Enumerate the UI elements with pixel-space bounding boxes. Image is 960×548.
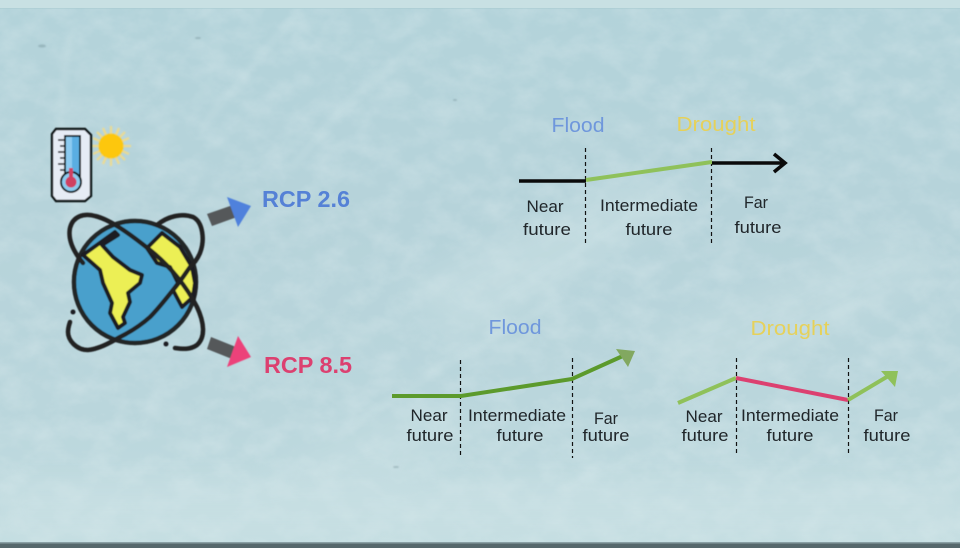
labels: timeline periods: Far: [874, 407, 898, 425]
labels: timeline periods: future: [734, 219, 782, 237]
line: rising flood trend: [392, 355, 625, 396]
labels: timeline periods: future: [496, 427, 544, 445]
labels: timeline periods: future: [864, 427, 910, 445]
line: intermediate future falling pink: [736, 378, 848, 400]
heading: Drought: Drought: [750, 318, 830, 340]
labels: timeline periods: future: [582, 427, 630, 445]
line: near future rising green: [678, 378, 736, 403]
icon: thermometer: [52, 129, 91, 201]
labels: timeline periods: [682, 407, 910, 445]
labels: timeline periods: Far: [744, 194, 768, 212]
icon: globe with orbits: [68, 215, 203, 350]
labels: timeline periods: Near: [526, 198, 564, 216]
orbit lines: [68, 215, 203, 350]
labels: timeline periods: future: [626, 221, 672, 239]
arrow: far future black: [712, 154, 785, 172]
arrow: far future rising green: [848, 371, 898, 400]
labels: timeline periods: [523, 194, 782, 239]
labels: timeline periods: future: [682, 427, 728, 445]
arrowhead: flood trend: [616, 349, 635, 367]
icon: thermometer and sun: [52, 126, 131, 201]
heading: Flood: Flood: [488, 317, 542, 339]
chart: bottom right drought timeline: [678, 318, 910, 456]
labels: timeline periods: [406, 407, 630, 445]
arrow: to RCP 8.5: [207, 336, 251, 367]
heading: Flood: Flood: [552, 115, 604, 137]
chart: bottom left flood timeline: [392, 317, 635, 458]
continent: africa and europe: [147, 233, 195, 307]
labels: timeline periods: Far: [594, 410, 618, 428]
arrow: to RCP 2.6: [207, 197, 251, 227]
labels: timeline periods: future: [766, 427, 814, 445]
labels: timeline periods: future: [523, 221, 571, 239]
labels: timeline periods: Near: [410, 407, 448, 425]
line: intermediate future green: [586, 162, 712, 180]
labels: timeline periods: Near: [686, 408, 723, 426]
orbit dots: [70, 310, 76, 314]
labels: timeline periods: Intermediate: [600, 197, 698, 215]
label: RCP 2.6: RCP 2.6: [262, 186, 350, 212]
labels: timeline periods: Intermediate: [468, 407, 566, 425]
heading: Drought: Drought: [676, 114, 756, 136]
labels: timeline periods: future: [406, 427, 454, 445]
line: near future black: [519, 179, 586, 183]
labels: timeline periods: Intermediate: [741, 407, 839, 425]
continent: americas: [83, 232, 142, 328]
chart: top timeline, flood then drought: [519, 114, 785, 246]
icon: sun: [91, 126, 131, 166]
globe ocean: [74, 221, 196, 343]
label: RCP 8.5: RCP 8.5: [264, 352, 352, 378]
